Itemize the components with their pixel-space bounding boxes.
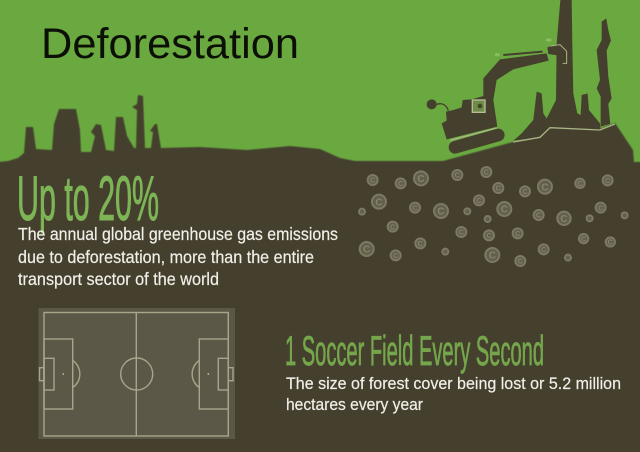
ground edge highlight (513, 124, 615, 142)
hydraulic arm (503, 52, 543, 55)
bubble carbon letters: C (536, 211, 542, 220)
bubble carbon letters: C (486, 231, 492, 240)
text block: greenhouse gas description: transport sector of the world (18, 269, 219, 289)
bubble carbon letters (363, 168, 614, 266)
text block: forest cover description: hectares every year (286, 395, 423, 414)
flying debris (495, 53, 500, 56)
text block: forest cover description (286, 374, 621, 414)
bubble carbon letters: C (375, 197, 383, 208)
bucket highlight (551, 45, 567, 63)
bubble carbon letters: C (522, 187, 528, 196)
illustration: broken trees and excavator (427, 0, 615, 147)
bubble carbon letters: C (393, 251, 399, 260)
text block: forest cover description: The size of forest cover being lost or 5.2 million (286, 374, 621, 393)
bubble carbon letters: C (496, 184, 502, 193)
bubble carbon letters: C (581, 234, 587, 243)
bubble carbon letters: C (370, 176, 376, 185)
excavator stick and bucket (547, 43, 568, 65)
bubble carbon letters: C (476, 196, 482, 205)
cab window dot (478, 104, 482, 108)
text: Up to 20% (17, 164, 159, 234)
bubble carbon letters: C (598, 203, 604, 212)
bubble carbon letters: C (518, 257, 524, 266)
text block: greenhouse gas description (18, 224, 338, 289)
bubble carbon letters: C (398, 179, 404, 188)
bubble carbon letters: C (577, 179, 583, 188)
panel: green sky background (0, 0, 640, 170)
tall broken tree (513, 0, 601, 141)
bubble carbon letters: C (363, 245, 370, 256)
right broken snag (597, 18, 612, 127)
bubble carbon letters: C (560, 214, 568, 225)
carbon bubbles in soil (359, 167, 628, 266)
bubble carbon letters: C (459, 228, 465, 237)
bubble carbon letters: C (455, 171, 461, 180)
cab window (472, 100, 485, 112)
exhaust pipe (435, 104, 448, 111)
bubble carbon letters: C (501, 205, 508, 216)
bubble carbon letters: C (417, 174, 425, 185)
excavator (427, 38, 568, 147)
bubble carbon letters: C (541, 245, 547, 254)
text block: greenhouse gas description: due to deforestation, more than the entire (18, 247, 314, 267)
bubble carbon letters: C (437, 207, 445, 218)
bubble carbon letters: C (484, 168, 490, 177)
penalty spots (62, 373, 209, 375)
bubble carbon letters: C (608, 238, 614, 247)
bubble rings (359, 167, 628, 266)
bubble carbon letters: C (515, 229, 521, 238)
text block: greenhouse gas description: The annual global greenhouse gas emissions (18, 224, 338, 244)
soccer field diagram (38, 308, 235, 439)
panel: dark soil ground with tree stumps (0, 95, 640, 452)
field surface (38, 308, 235, 439)
bubble carbon letters: C (418, 239, 424, 248)
bubble carbon letters: C (412, 203, 418, 212)
bubble carbon letters: C (541, 182, 549, 193)
exhaust puff (427, 99, 437, 109)
flying debris 2 (546, 38, 552, 42)
bubble carbon letters: C (489, 251, 496, 262)
field markings (40, 312, 233, 436)
excavator body and boom (442, 53, 549, 139)
bubble carbon letters: C (390, 222, 396, 231)
excavator track (455, 135, 498, 147)
title: Deforestation (41, 20, 299, 68)
bubble carbon letters: C (605, 176, 611, 185)
track highlight (450, 128, 497, 140)
